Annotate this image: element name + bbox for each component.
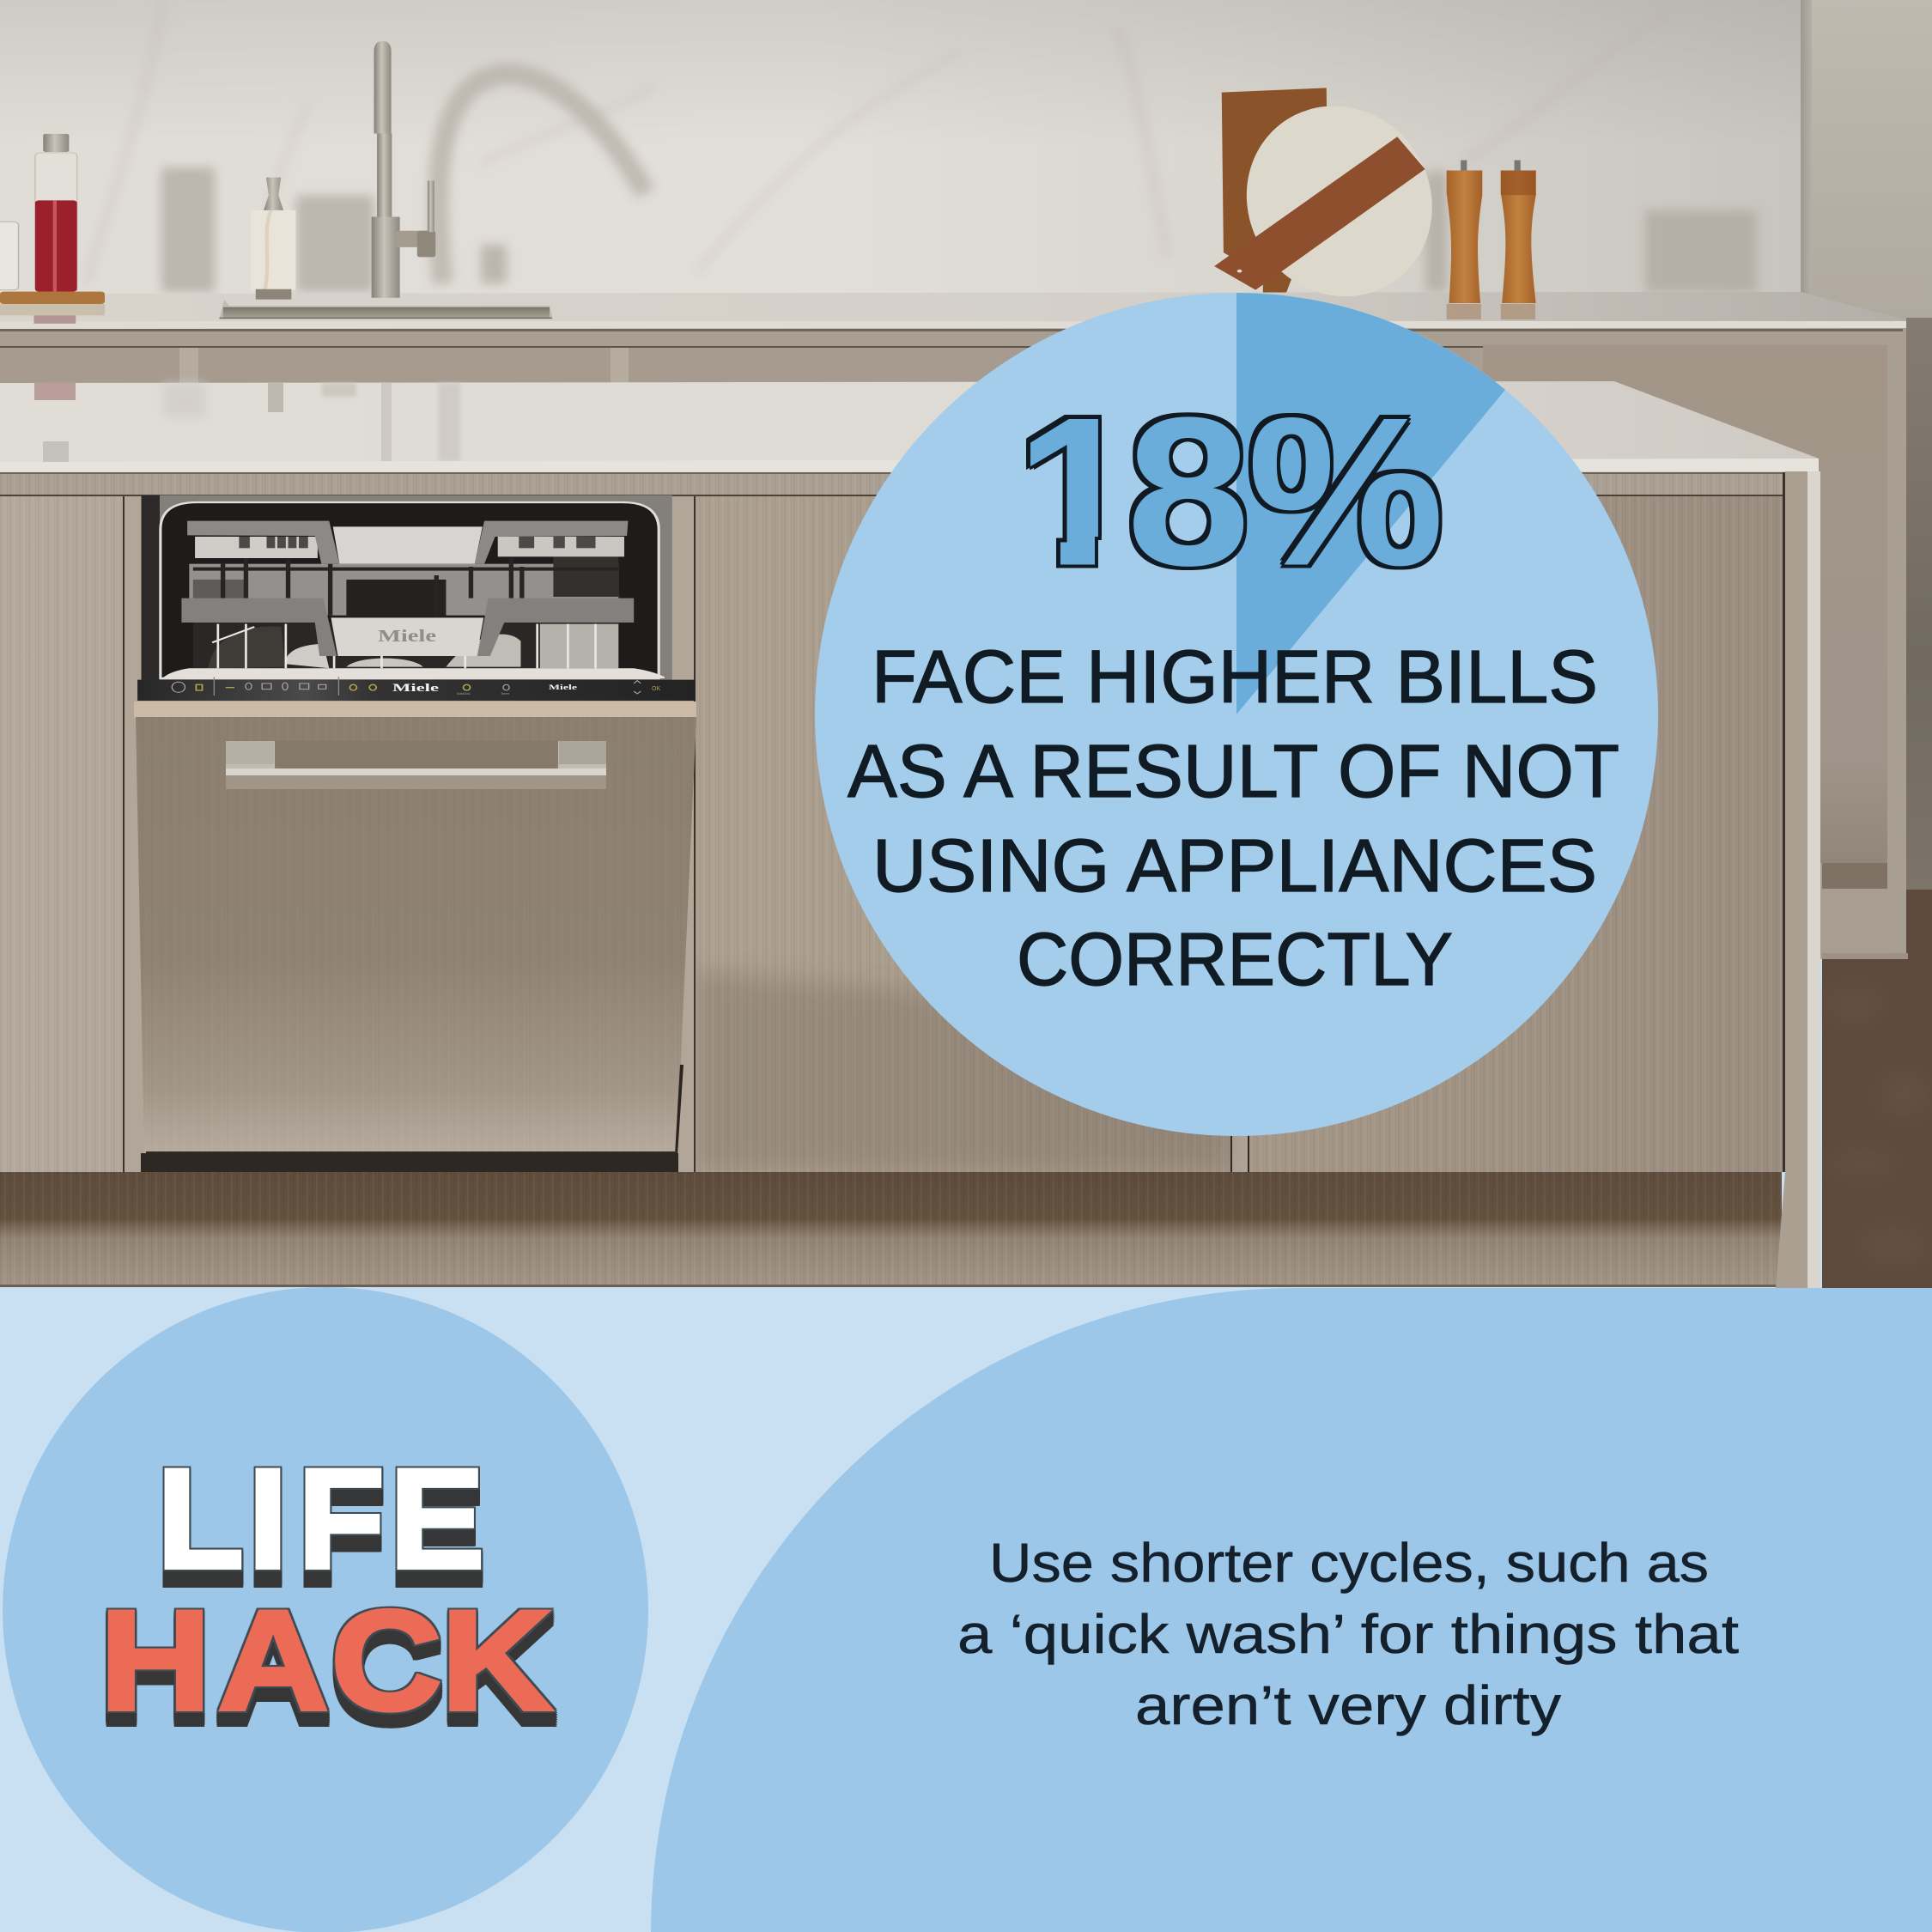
dishwasher interior [137, 495, 696, 701]
panel small labels: Timer [501, 691, 510, 696]
footer background [0, 1288, 1932, 1932]
big number 18%: 1 [1016, 375, 1139, 610]
toe kick [0, 1172, 1782, 1287]
life hack tip text: Use shorter cycles, such as [989, 1532, 1709, 1594]
panel: pie chart statistic circle [815, 293, 1658, 1136]
lower compartment [193, 623, 618, 670]
panel: life hack footer [0, 1287, 1932, 1932]
glass [0, 222, 19, 290]
statistic description text: USING APPLIANCES [872, 824, 1597, 908]
second panel Miele logo: Miele [549, 683, 578, 691]
dishwasher handle [226, 741, 606, 789]
island cabinet doors [0, 472, 1785, 1172]
statistic description text [848, 635, 1619, 1001]
opening surround [125, 496, 694, 1172]
sink [219, 300, 553, 319]
island worktop [0, 381, 1819, 472]
wooden chopping board [1222, 88, 1327, 293]
large right circle [651, 1288, 1932, 1932]
dishwasher [125, 495, 696, 1172]
marble splashback wall [0, 0, 1801, 296]
dishwasher door [136, 717, 696, 1153]
life hack title: LIFE [157, 1439, 484, 1597]
panel small labels: OK [652, 686, 660, 692]
kitchen photo background [0, 0, 1932, 1288]
soap dispenser [251, 178, 295, 300]
life hack tip text: aren’t very dirty [1135, 1674, 1561, 1736]
marble round board [1237, 102, 1442, 301]
life hack title [100, 1439, 552, 1740]
pie base [815, 293, 1658, 1136]
left circle [3, 1287, 648, 1932]
white door rim [162, 668, 665, 678]
wooden strap [1214, 137, 1425, 290]
statistic description text: CORRECTLY [1017, 918, 1453, 1001]
statistic description text: AS A RESULT OF NOT [848, 730, 1619, 813]
island band above doors [0, 472, 1784, 496]
island end panel [1776, 471, 1820, 1288]
life hack tip text: a ‘quick wash’ for things that [957, 1603, 1739, 1665]
dishwasher door side gap [675, 1065, 683, 1155]
rear worktop [0, 292, 1906, 331]
statistic description text: FACE HIGHER BILLS [872, 635, 1598, 719]
tap [372, 41, 435, 298]
life hack tip text [957, 1532, 1739, 1736]
panel small labels: AutoDos [457, 691, 470, 696]
big number 18% [1026, 412, 1443, 570]
sink unit tap soap bottle and board [0, 41, 553, 324]
pepper mill one [1447, 170, 1482, 303]
panel small labels [457, 686, 660, 696]
control panel Miele logo: Miele [392, 681, 439, 694]
big number 18%: 8% [1127, 375, 1444, 610]
upper basket cutlery [195, 537, 318, 558]
red bottle [35, 134, 77, 292]
right side wall [1801, 0, 1932, 893]
worktop reflections [34, 383, 460, 462]
basket Miele logo: Miele [378, 627, 436, 646]
chopping boards and pepper mills [1214, 88, 1536, 319]
upper basket handles [187, 521, 339, 564]
wall shadows [161, 74, 1757, 292]
wire rack [193, 558, 618, 616]
back wall of tub [189, 564, 618, 616]
wooden board [0, 292, 105, 324]
dishwasher door cap strip [134, 702, 696, 718]
lower basket handles [181, 598, 337, 656]
rear cabinet band and drawers [0, 328, 1908, 959]
control panel [137, 680, 696, 701]
pepper mill two [1501, 170, 1536, 303]
18 percent pie wedge [1236, 293, 1505, 714]
life hack title: HACK [100, 1583, 552, 1740]
mill reflections [1447, 304, 1481, 319]
floor [1822, 890, 1932, 1288]
